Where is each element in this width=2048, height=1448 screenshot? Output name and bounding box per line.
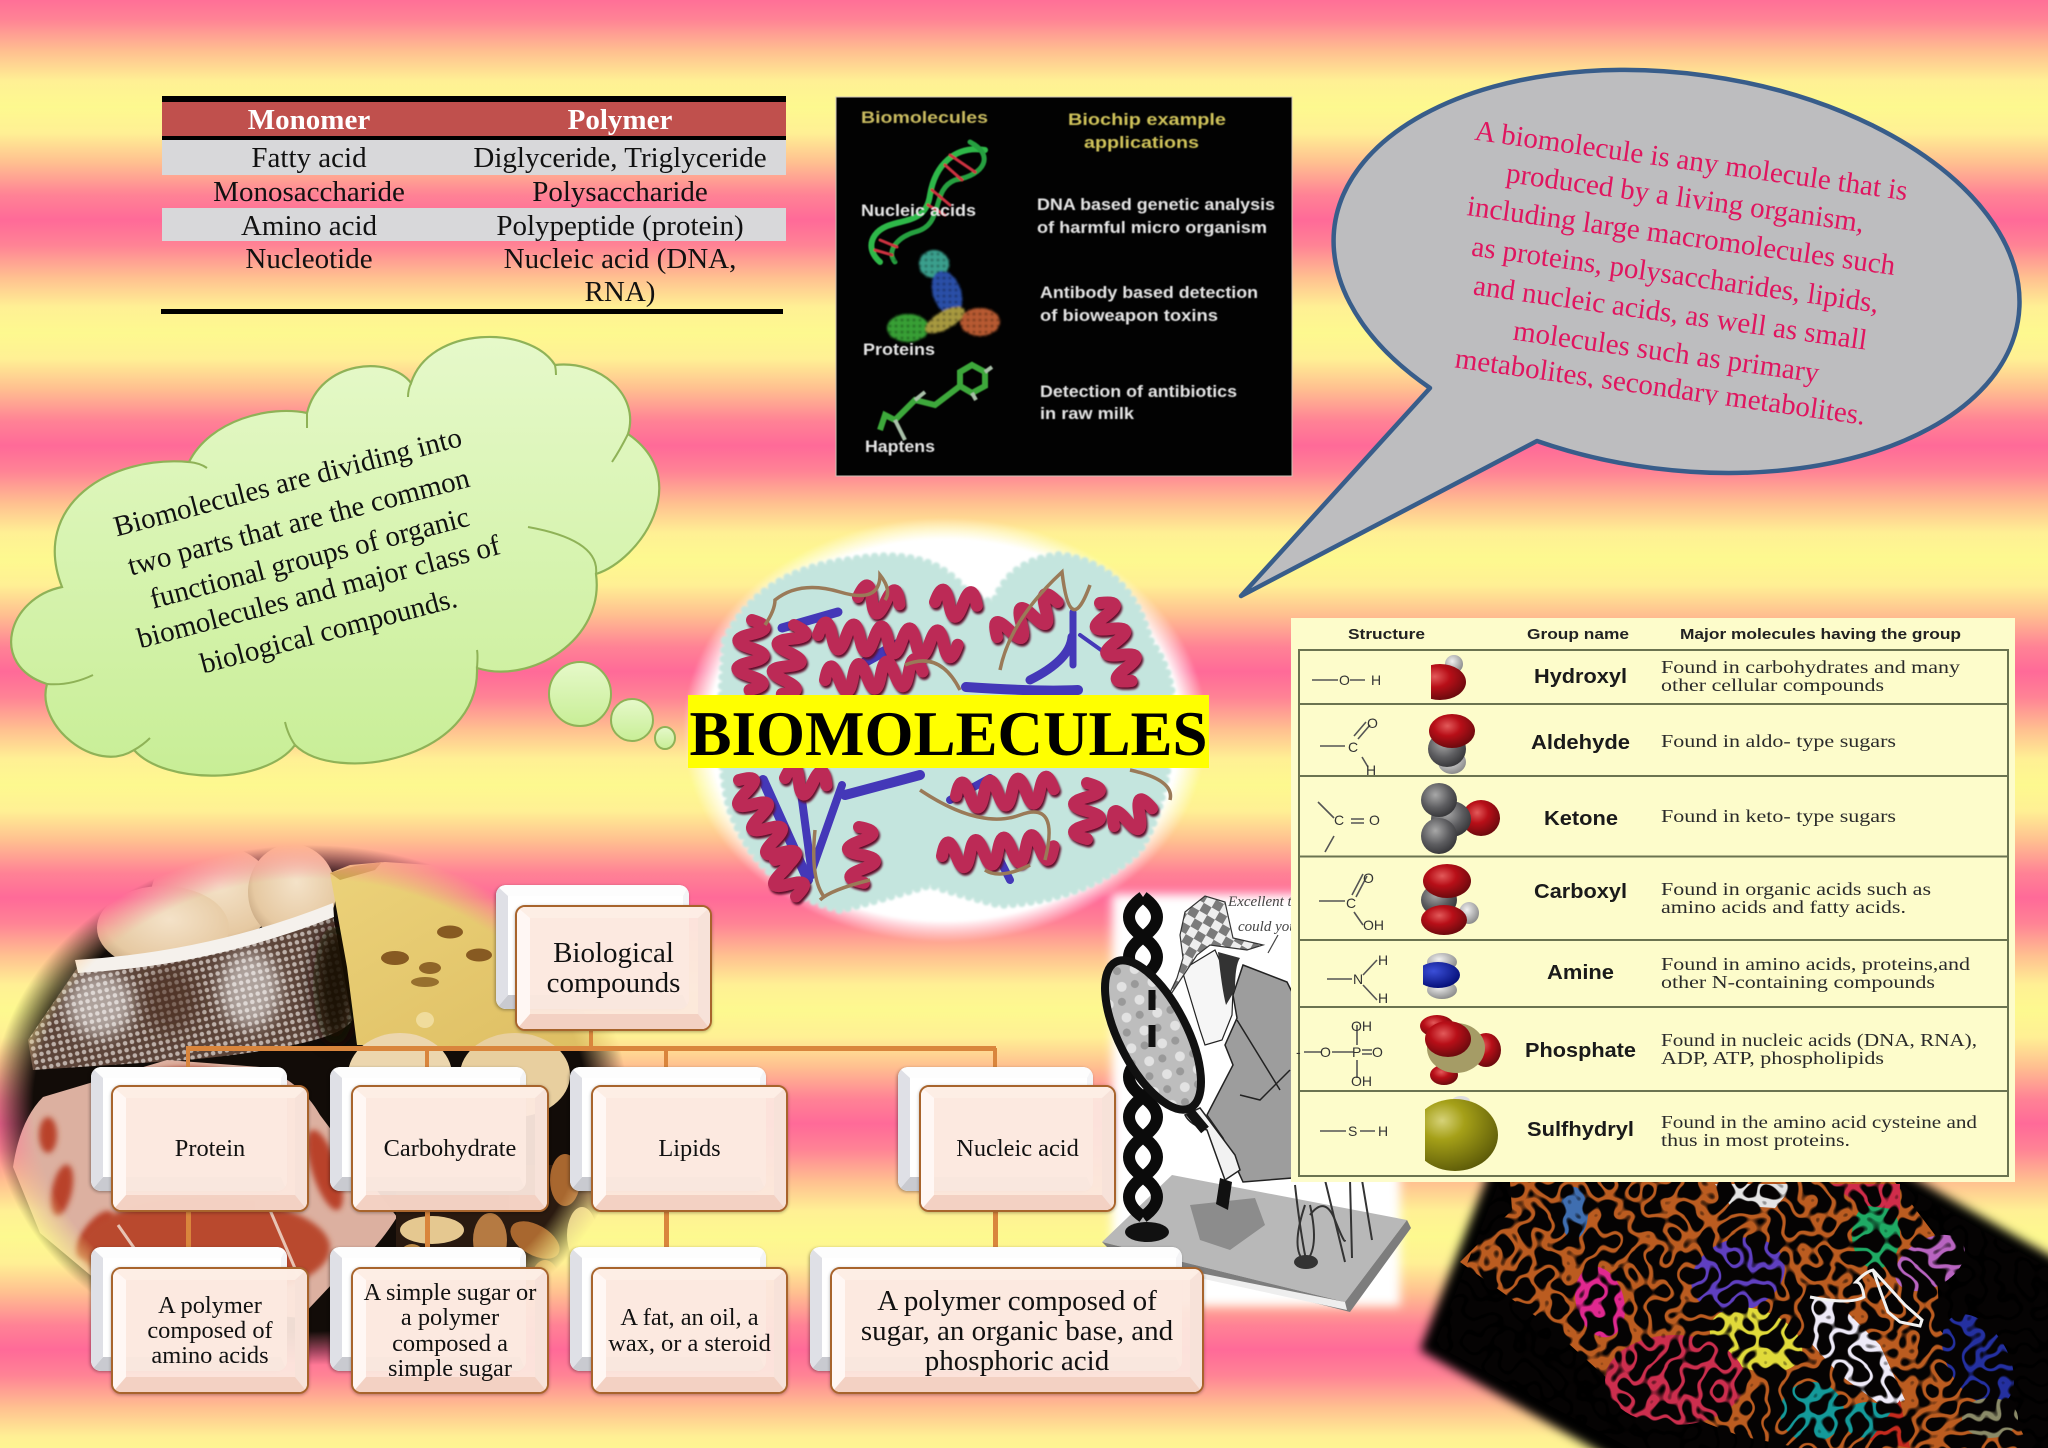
table rows: Amino acid (241, 210, 378, 242)
descriptions: other N-containing compounds (1661, 972, 1935, 992)
node: polymer of amino acids: amino acids (151, 1342, 269, 1369)
cloud text: two parts that are the common (124, 462, 473, 582)
group names (1525, 666, 1636, 1141)
table rows: Monosaccharide (213, 176, 405, 208)
group names: Sulfhydryl (1527, 1119, 1634, 1141)
thought bubbles (549, 662, 675, 749)
cartoon speech text: could you b (1238, 919, 1308, 935)
node: carbohydrate: Carbohydrate (384, 1134, 516, 1162)
biochip labels: Biomolecules (861, 108, 988, 127)
structural formulas: C (1346, 895, 1356, 911)
DNA helix sculpture (1125, 897, 1169, 1242)
beta sheets (763, 612, 1108, 880)
biochip labels: Nucleic acids (861, 201, 976, 220)
descriptions: Found in amino acids, proteins,and (1661, 954, 1970, 974)
structural formulas: N (1353, 971, 1363, 987)
structural formulas: O (1367, 715, 1378, 731)
structural formulas: H (1378, 990, 1388, 1006)
cloud text: Biomolecules are dividing into (110, 421, 465, 543)
cheese wedge (330, 862, 618, 1046)
table rows: Polysaccharide (532, 176, 708, 208)
table rows: Diglyceride, Triglyceride (473, 142, 767, 174)
structural formulas (1296, 672, 1388, 1139)
descriptions: Found in carbohydrates and many (1661, 657, 1960, 677)
descriptions: Found in keto- type sugars (1661, 806, 1896, 826)
table rows: Polypeptide (protein) (496, 210, 744, 242)
structural formulas: H (1378, 952, 1388, 968)
biochip labels: Detection of antibiotics (1040, 382, 1237, 401)
node: protein: Protein (175, 1134, 245, 1162)
column headers: Major molecules having the group (1680, 626, 1961, 643)
node: simple sugar: a polymer (401, 1304, 499, 1331)
descriptions: Found in nucleic acids (DNA, RNA), (1661, 1030, 1977, 1051)
ribosome tangle (1435, 1180, 2048, 1448)
group names: Phosphate (1525, 1040, 1636, 1062)
node: polymer of amino acids: composed of (147, 1317, 273, 1344)
nuts (396, 1154, 594, 1274)
node: simple sugar: composed a (392, 1330, 508, 1356)
cloud text: biological compounds. (197, 582, 461, 680)
functional groups table panel (1291, 618, 2015, 1182)
node: lipids: Lipids (658, 1134, 721, 1162)
structural formulas: O (1372, 1044, 1383, 1060)
structural formulas: OH (1351, 1073, 1372, 1089)
node: sugar, organic base, phosphoric acid: A polymer composed of (877, 1284, 1157, 1316)
coil loops (765, 572, 1170, 900)
structural formulas: H (1366, 762, 1376, 778)
biochip labels: of harmful micro organism (1037, 218, 1267, 237)
cartoon speech text: Excellent try, (1227, 894, 1307, 910)
descriptions (1661, 657, 1977, 1150)
table rows: Nucleic acid (DNA, (504, 243, 736, 275)
magnifying glass (1085, 947, 1221, 1130)
descriptions: ADP, ATP, phospholipids (1661, 1048, 1884, 1068)
group names: Carboxyl (1534, 881, 1627, 903)
node: nucleic acid: Nucleic acid (956, 1134, 1079, 1162)
flask and tubes (1295, 1180, 1372, 1262)
cloud text: biomolecules and major class of (134, 529, 504, 655)
table rows: Nucleotide (245, 243, 373, 275)
descriptions: Found in the amino acid cysteine and (1661, 1112, 1977, 1132)
node: simple sugar: simple sugar (388, 1355, 512, 1382)
node: biological compounds: Biological (553, 937, 674, 969)
group names: Hydroxyl (1534, 666, 1627, 688)
speech bubble (1241, 70, 2020, 596)
biochip labels: applications (1084, 133, 1199, 152)
structural formulas: C (1334, 812, 1344, 828)
image: protein structure (683, 518, 1207, 942)
image: detective cartoon (1085, 894, 1411, 1312)
bubble text: metabolites, secondary metabolites. (1453, 342, 1867, 432)
alpha helices (728, 584, 1158, 903)
image: ribosome structure (1420, 1170, 2048, 1448)
grid (1299, 650, 2008, 1176)
node: biological compounds: compounds (547, 967, 680, 999)
node: fat, oil, wax, steroid: wax, or a steroid (608, 1330, 771, 1356)
node: polymer of amino acids: A polymer (158, 1292, 262, 1319)
structural formulas: - (1296, 1044, 1301, 1060)
structural formulas: H (1371, 672, 1381, 688)
structural formulas: O (1320, 1044, 1331, 1060)
descriptions: other cellular compounds (1661, 675, 1884, 695)
group names: Ketone (1544, 808, 1618, 830)
structural formulas: H (1378, 1123, 1388, 1139)
structural formulas: O (1363, 870, 1374, 886)
table rows (213, 142, 767, 308)
node: fat, oil, wax, steroid: A fat, an oil, a (620, 1304, 759, 1331)
cartoon speech text (1227, 894, 1308, 953)
biochip labels: Antibody based detection (1040, 283, 1258, 302)
group names: Amine (1547, 962, 1614, 984)
molecular surface (721, 555, 1172, 910)
bubble text: A biomolecule is any molecule that is (1473, 115, 1910, 207)
white loop strand (1810, 1270, 1922, 1326)
bubble text: including large macromolecules such (1465, 190, 1898, 282)
space-filling models (1412, 655, 1501, 1171)
structural formulas: OH (1363, 917, 1384, 933)
column headers: Group name (1527, 626, 1629, 643)
image: biochip applications panel (836, 97, 1292, 476)
image: food collage (0, 840, 660, 1380)
table header: Monomer (248, 104, 370, 136)
descriptions: Found in organic acids such as (1661, 879, 1931, 899)
table rows: Fatty acid (251, 142, 367, 174)
column headers: Structure (1348, 626, 1425, 643)
cloud text: functional groups of organic (147, 501, 473, 615)
biochip labels: Biochip example (1068, 110, 1226, 129)
node: simple sugar: A simple sugar or (364, 1279, 536, 1306)
biochip labels (861, 108, 1275, 456)
column headers (1348, 626, 1961, 643)
cloud text (110, 421, 504, 680)
thought cloud (11, 337, 675, 776)
bubble text: molecules such as primary (1511, 315, 1822, 389)
structural formulas: S (1348, 1123, 1357, 1139)
biochip labels: Proteins (863, 340, 935, 359)
title: BIOMOLECULES (689, 699, 1208, 769)
structural formulas: O (1339, 672, 1350, 688)
biochip labels: Haptens (865, 437, 935, 456)
detective figure (1165, 896, 1292, 1210)
colander (28, 903, 357, 1070)
structural formulas: P (1352, 1044, 1361, 1060)
bubble text (1453, 115, 1910, 432)
eggs in colander (97, 846, 336, 957)
group names: Aldehyde (1531, 732, 1630, 754)
node: sugar, organic base, phosphoric acid: sugar, an organic base, and (861, 1314, 1173, 1346)
biochip labels: in raw milk (1040, 404, 1135, 423)
table rows: RNA) (585, 276, 655, 308)
icon: hapten molecule (880, 365, 992, 440)
structural formulas: C (1348, 739, 1358, 755)
structural formulas: O (1369, 812, 1380, 828)
bubble text: and nucleic acids, as well as small (1471, 270, 1869, 357)
descriptions: Found in aldo- type sugars (1661, 731, 1896, 751)
node: sugar, organic base, phosphoric acid: phosphoric acid (925, 1344, 1109, 1376)
icon: DNA helix (871, 142, 985, 262)
eggs lower (348, 1033, 570, 1117)
bubble text: as proteins, polysaccharides, lipids, (1470, 231, 1881, 320)
table header (248, 104, 672, 136)
icon: protein model (885, 250, 1005, 345)
meat (13, 1060, 397, 1318)
descriptions: thus in most proteins. (1661, 1130, 1850, 1150)
structural formulas: OH (1351, 1018, 1372, 1034)
biochip labels: DNA based genetic analysis (1037, 195, 1275, 214)
biochip labels: of bioweapon toxins (1040, 306, 1218, 325)
descriptions: amino acids and fatty acids. (1661, 897, 1906, 917)
table header: Polymer (568, 104, 672, 136)
monomer and polymer table (161, 96, 786, 314)
bubble text: produced by a living organism, (1504, 157, 1866, 239)
lab bench (1102, 1175, 1407, 1302)
